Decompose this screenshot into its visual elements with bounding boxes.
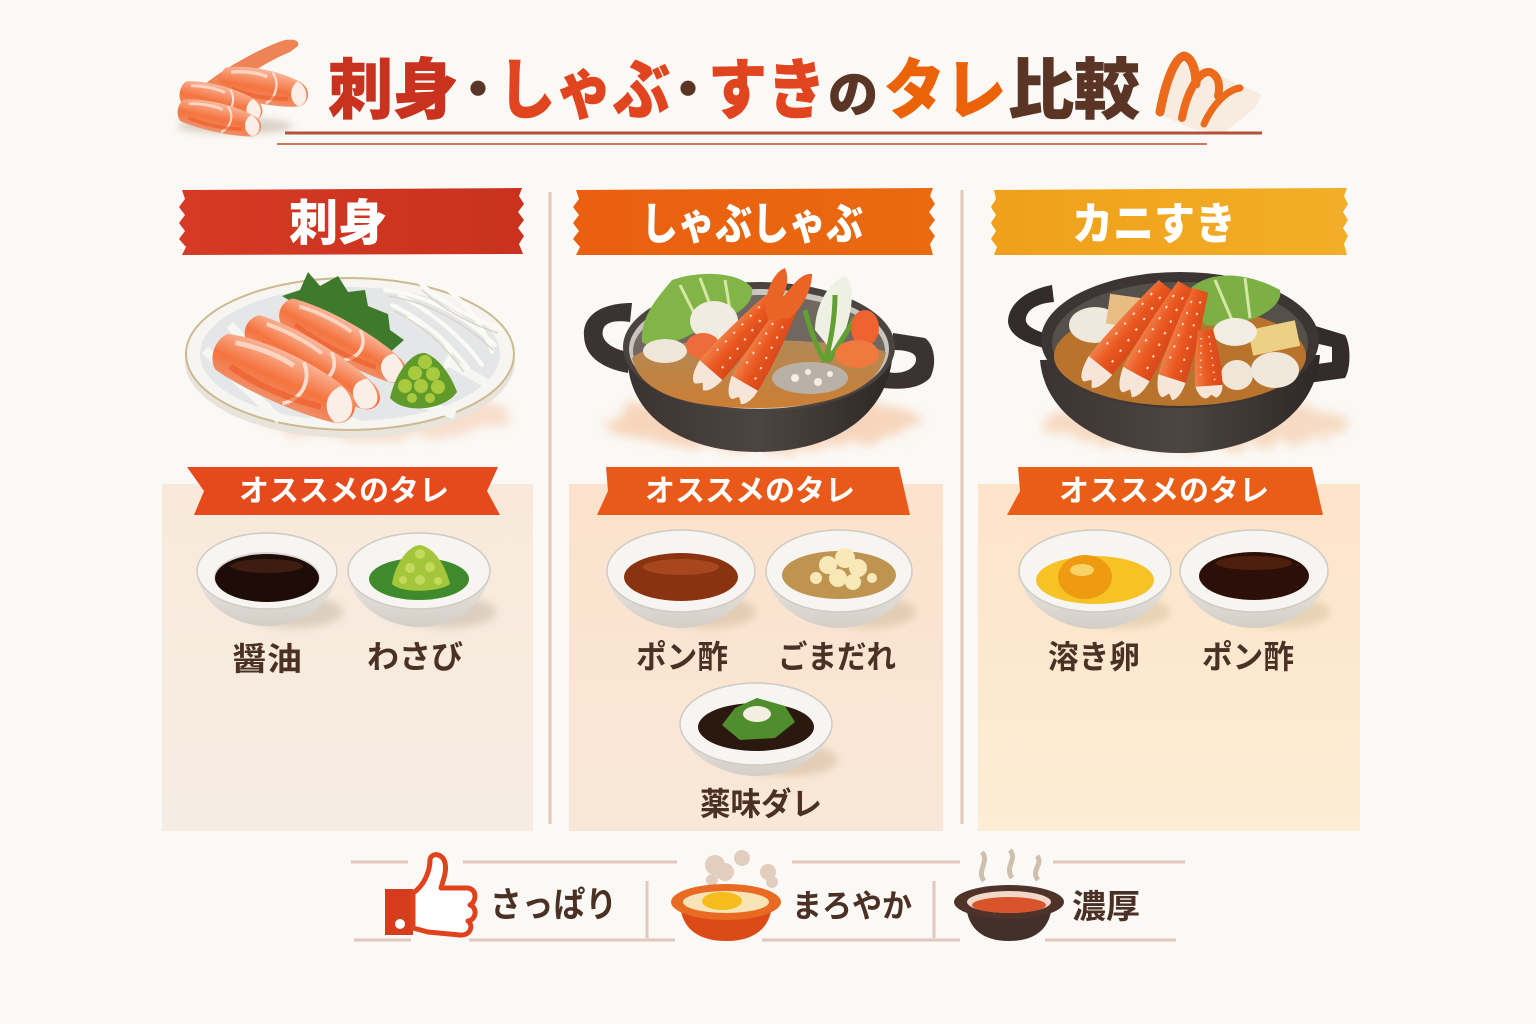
illustration: crab sashimi plate <box>185 272 515 440</box>
sauce: soy sauce: 醤油 <box>232 641 302 677</box>
sauce: wasabi: わさび <box>367 639 463 675</box>
sub-heading ribbon: オススメのタレ <box>1059 475 1269 508</box>
title text: ・ <box>452 62 504 120</box>
legend item: refreshing: さっぱり <box>490 886 617 925</box>
sauce: beaten egg <box>1019 530 1171 675</box>
sub-heading ribbon <box>187 467 500 515</box>
legend item: refreshing <box>385 855 617 935</box>
icon: crab sushi <box>1155 56 1262 134</box>
heading ribbon: crab sukiyaki: カニすき <box>1072 200 1236 249</box>
sauce: condiment sauce: 薬味ダレ <box>700 786 822 822</box>
sauce: ponzu <box>1180 530 1330 675</box>
panel background: sashimi sauces <box>162 484 533 831</box>
title text: の <box>828 67 878 123</box>
sauce: sesame sauce: ごまだれ <box>778 639 896 675</box>
icon: crab legs <box>175 40 311 141</box>
title block <box>175 40 1262 144</box>
sauce: condiment sauce <box>680 683 838 822</box>
heading ribbon: sashimi <box>179 188 524 255</box>
panel background: shabu-shabu sauces <box>569 484 943 831</box>
legend item: mellow <box>671 850 912 941</box>
sub-heading ribbon: オススメのタレ <box>239 475 449 508</box>
legend <box>351 850 1185 941</box>
title text: ・ <box>662 62 714 120</box>
sauce: ponzu: ポン酢 <box>1202 639 1294 675</box>
sauce: soy sauce <box>197 533 343 677</box>
sub-heading ribbon: オススメのタレ <box>645 475 855 508</box>
panel: crab sukiyaki <box>978 188 1360 831</box>
sauce: beaten egg: 溶き卵 <box>1048 639 1140 675</box>
panel: sashimi <box>162 188 533 831</box>
heading ribbon: sashimi: 刺身 <box>289 197 387 251</box>
title text: 刺身 <box>328 53 458 127</box>
title text: しゃぶ <box>498 53 670 127</box>
heading ribbon: shabu-shabu: しゃぶしゃぶ <box>641 200 863 249</box>
wasabi mound <box>390 353 457 408</box>
column dividers <box>550 190 962 824</box>
sub-heading ribbon <box>597 467 910 515</box>
title text <box>328 53 1140 127</box>
legend item: rich <box>954 850 1140 941</box>
sauce: ponzu <box>607 530 756 675</box>
title text: タレ <box>884 53 1006 127</box>
legend item: mellow: まろやか <box>792 888 912 924</box>
panel background: sukiyaki sauces <box>978 484 1360 831</box>
heading ribbon: shabu-shabu <box>573 188 935 255</box>
heading ribbon: crab sukiyaki <box>991 188 1348 255</box>
illustration: sukiyaki pot <box>1008 272 1350 453</box>
illustration: shabu-shabu pot <box>584 268 934 452</box>
sauce: sesame sauce <box>766 530 916 675</box>
title text: すき <box>708 53 826 127</box>
sauce: wasabi <box>348 533 496 675</box>
panel: shabu-shabu <box>569 188 943 831</box>
legend item: rich: 濃厚 <box>1072 888 1140 925</box>
title text: 比較 <box>1008 53 1140 127</box>
sauce: ponzu: ポン酢 <box>636 639 728 675</box>
sub-heading ribbon <box>1007 467 1323 515</box>
